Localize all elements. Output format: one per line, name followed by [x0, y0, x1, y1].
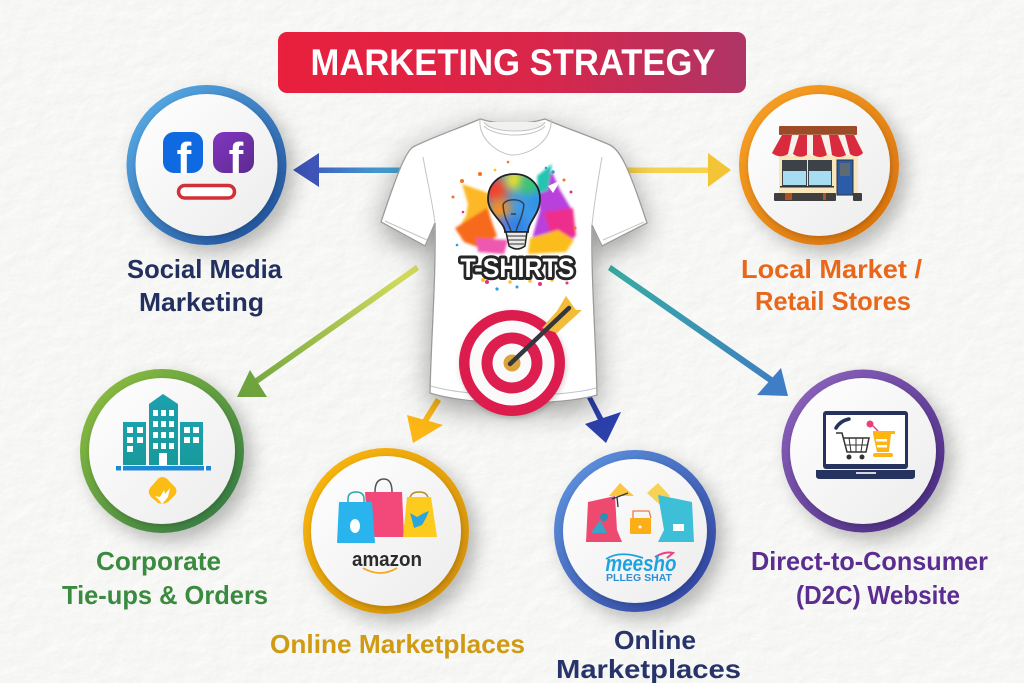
label: Online Marketplaces — [270, 629, 525, 659]
icon: laptop with carts — [816, 411, 915, 479]
panel: online marketplaces meesho — [554, 450, 741, 683]
arrow: to D2C website — [608, 265, 788, 396]
panel: social media marketing — [126, 85, 286, 317]
label: Retail Stores — [755, 286, 911, 316]
icon ring — [80, 369, 244, 533]
label — [127, 254, 283, 317]
panel: online marketplaces amazon — [270, 448, 525, 659]
collar — [385, 119, 644, 395]
label: Online — [614, 625, 696, 655]
label: Marketing — [139, 287, 264, 317]
light bulb — [487, 173, 541, 250]
icon: shopping bags — [337, 479, 437, 543]
meesho wordmark: meesho — [606, 551, 676, 576]
amazon wordmark: amazon — [352, 549, 422, 571]
label: Corporate — [96, 546, 221, 576]
icon ring — [739, 85, 899, 245]
shirt body — [381, 119, 647, 403]
icon: red pill — [178, 186, 234, 198]
title banner — [278, 32, 746, 93]
icon ring — [126, 85, 286, 245]
icon: parcels and lock — [586, 483, 694, 542]
icon: facebook purple — [213, 132, 254, 183]
panel: direct-to-consumer website — [751, 370, 988, 610]
label: Tie-ups & Orders — [62, 580, 268, 610]
t-shirt — [381, 119, 647, 416]
icon: yellow handshake badge — [149, 477, 176, 504]
panel: corporate tie-ups and orders — [62, 369, 268, 610]
label — [751, 546, 988, 610]
icon: office buildings — [116, 394, 211, 470]
label: Local Market / — [741, 254, 922, 284]
title banner: MARKETING STRATEGY — [310, 42, 716, 83]
paint splash — [452, 161, 576, 291]
meesho wordmark — [606, 551, 676, 584]
label: (D2C) Website — [796, 580, 960, 610]
meesho wordmark: PLLEG SHAT — [606, 573, 672, 584]
icon: facebook purple: f — [229, 134, 244, 183]
arrow: to local market — [618, 153, 731, 187]
label — [741, 254, 922, 316]
icon: store — [772, 126, 863, 201]
icon: facebook blue: f — [177, 134, 192, 183]
arrow: to meesho marketplace — [585, 397, 621, 443]
arrow: to amazon marketplace — [407, 398, 443, 443]
icon ring — [782, 370, 944, 532]
label — [62, 546, 268, 610]
label — [556, 625, 741, 683]
icon ring — [303, 448, 469, 614]
icon ring — [554, 450, 716, 612]
icon: facebook blue — [163, 132, 203, 183]
label: Social Media — [127, 254, 283, 284]
arrow: to social media — [293, 153, 408, 187]
panel: local market retail stores — [739, 85, 922, 316]
arrow: to corporate — [237, 265, 419, 397]
target with arrow — [459, 296, 582, 416]
t-shirts logo text: T-SHIRTS — [460, 253, 574, 283]
label: Direct-to-Consumer — [751, 546, 988, 576]
